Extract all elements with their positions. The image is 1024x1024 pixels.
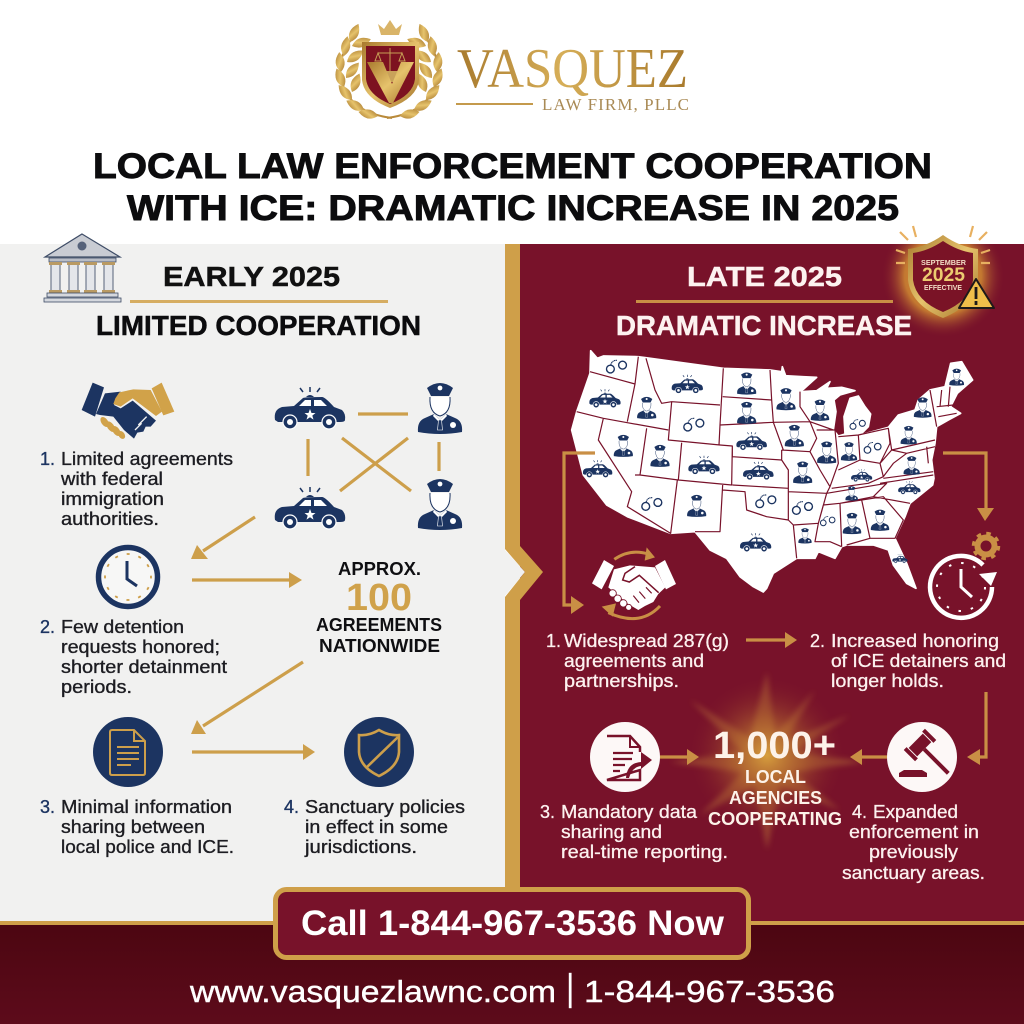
icon: shield with V and scales [362, 42, 419, 108]
heading: late 2025: LATE 2025 [687, 261, 842, 292]
stat: 1,000+ local agencies cooperating: LOCAL [745, 767, 806, 787]
divider with chevron [504, 244, 543, 888]
stat: 1,000+ local agencies cooperating [708, 725, 842, 829]
text: item 3 early: local police and ICE. [61, 837, 234, 857]
button text: Call 1-844-967-3536 Now [301, 904, 725, 943]
text: item 1 late: Widespread 287(g) [564, 631, 729, 651]
text: item 4 early: jurisdictions. [304, 837, 417, 857]
text: item 4 late [842, 802, 985, 883]
panel: early 2025 [0, 244, 505, 922]
text: item 4 late: enforcement in [849, 822, 979, 842]
footer gold rule [0, 921, 1024, 925]
text: item 3 early: 3. [40, 797, 55, 817]
arrow: document to stat [660, 749, 699, 765]
text: item 1 early: authorities. [61, 509, 159, 529]
text: item 4 early: 4. [284, 797, 299, 817]
text: item 1 early: immigration [61, 489, 164, 509]
map handcuff icons [606, 360, 881, 526]
icon: gear [974, 534, 998, 558]
footer contact line: 1-844-967-3536 [584, 974, 835, 1009]
map outline [572, 351, 973, 592]
icon: handshake white with cycle arrows [592, 547, 676, 619]
arrow: to stat [192, 572, 302, 588]
text: item 4 early: Sanctuary policies [305, 797, 465, 817]
icon: warning triangle [959, 279, 994, 308]
text: item 2 late: longer holds. [831, 671, 944, 691]
title: LOCAL LAW ENFORCEMENT COOPERATION [93, 147, 932, 186]
icon: laurel wreath [332, 22, 446, 120]
text: item 3 early [40, 797, 234, 857]
subheading: dramatic increase: DRAMATIC INCREASE [616, 310, 912, 341]
text: item 2 early: Few detention [61, 617, 184, 637]
starburst glow [670, 672, 865, 850]
title: WITH ICE: DRAMATIC INCREASE IN 2025 [127, 189, 899, 228]
logo wordmark: VASQUEZ [457, 38, 688, 100]
text: item 3 late: 3. [540, 802, 555, 822]
title [93, 147, 932, 228]
text: item 3 early: Minimal information [61, 797, 232, 817]
text: item 2 early [40, 617, 227, 697]
icon: crown [378, 20, 402, 35]
arrow: map to item 1 [564, 453, 595, 614]
icon: shield circle [344, 717, 414, 787]
text: item 1 late: agreements and [564, 651, 704, 671]
arrow: to item 2 [191, 517, 255, 559]
badge: september 2025 effective: SEPTEMBER [921, 258, 967, 267]
state borders [577, 357, 957, 558]
text: item 3 late: sharing and [561, 822, 662, 842]
badge: september 2025 effective [896, 226, 994, 318]
footer band [0, 925, 1024, 1024]
heading rule [130, 300, 388, 303]
text: item 1 early: Limited agreements [61, 449, 233, 469]
icon: document circle white [590, 722, 660, 792]
text: item 2 early: periods. [61, 677, 132, 697]
arrow: to item 3 [191, 662, 303, 734]
stat: approx 100 agreements [316, 559, 442, 656]
text: item 4 late: Expanded [873, 802, 958, 822]
map officer icons [614, 369, 964, 543]
map: united states with enforcement icons [572, 351, 973, 592]
stat: 1,000+ local agencies cooperating: AGENCIES [729, 788, 822, 808]
text: item 2 early: requests honored; [61, 637, 220, 657]
text: item 2 early: shorter detainment [61, 657, 227, 677]
stat: approx 100 agreements: APPROX. [338, 559, 421, 579]
text: item 3 late [540, 802, 728, 862]
text: item 4 late: 4. [852, 802, 867, 822]
icon: clock white with gear [930, 534, 998, 618]
stat: approx 100 agreements: 100 [346, 577, 412, 619]
badge glow [881, 244, 1005, 338]
text: item 1 late: 1. [546, 631, 561, 651]
text: item 2 late: of ICE detainers and [831, 651, 1006, 671]
arrow: gavel to stat [850, 749, 887, 765]
text: item 3 early: sharing between [61, 817, 205, 837]
icon: handshake navy and gold [82, 383, 174, 440]
map police car icons [583, 375, 920, 563]
heading: early 2025: EARLY 2025 [163, 261, 340, 292]
icon: gavel circle white [887, 722, 959, 792]
text: item 2 late: Increased honoring [831, 631, 999, 651]
stat: approx 100 agreements: NATIONWIDE [319, 636, 440, 656]
text: item 1 early: 1. [40, 449, 55, 469]
footer contact line [189, 973, 835, 1009]
arrow: map to item 2 [943, 453, 994, 521]
text: item 4 late: previously [869, 842, 958, 862]
call button [276, 890, 748, 958]
logo rule [456, 103, 533, 105]
subheading: limited cooperation: LIMITED COOPERATION [96, 310, 421, 341]
text: item 2 late: 2. [810, 631, 825, 651]
logo: Vasquez Law Firm [332, 20, 689, 120]
stat: 1,000+ local agencies cooperating: 1,000+ [713, 725, 836, 767]
text: item 1 late [546, 631, 729, 691]
arrow: item 1 to 2 [746, 632, 797, 648]
icon: courthouse [44, 234, 121, 302]
logo subline: LAW FIRM, PLLC [542, 95, 689, 114]
stat: approx 100 agreements: AGREEMENTS [316, 615, 442, 635]
text: item 4 early: in effect in some [305, 817, 448, 837]
text: item 1 early [40, 449, 233, 529]
text: item 4 early [284, 797, 465, 857]
badge: september 2025 effective: 2025 [922, 265, 965, 286]
icon: document circle [93, 717, 163, 787]
text: item 3 late: Mandatory data [561, 802, 698, 822]
text: item 1 early: with federal [60, 469, 163, 489]
icon: police network [275, 383, 462, 530]
badge: september 2025 effective: EFFECTIVE [924, 285, 962, 292]
text: item 2 late [810, 631, 1006, 691]
arrow: item 2 to gavel [967, 692, 986, 765]
text: item 2 early: 2. [40, 617, 55, 637]
footer contact line: www.vasquezlawnc.com [189, 974, 556, 1009]
stat: 1,000+ local agencies cooperating: COOPERATING [708, 809, 842, 829]
text: item 3 late: real-time reporting. [561, 842, 728, 862]
panel: late 2025 [520, 244, 1024, 922]
heading rule [636, 300, 893, 303]
arrow: to item 4 [192, 744, 315, 760]
icon: clock [98, 548, 158, 606]
text: item 4 late: sanctuary areas. [842, 863, 985, 883]
text: item 1 late: partnerships. [564, 671, 679, 691]
